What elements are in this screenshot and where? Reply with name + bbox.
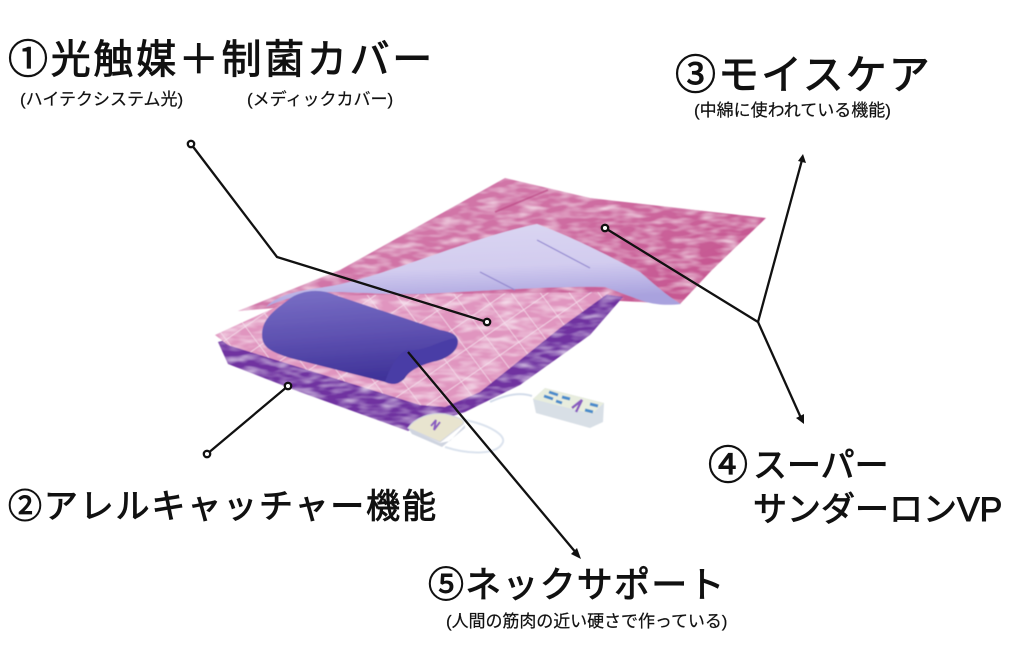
leader lines 3 and 4: branching arrows [602, 154, 806, 424]
heading 4 [708, 444, 1002, 529]
subtext 1 left: (ハイテクシステム光) [20, 90, 183, 109]
subtext 1 right: (メディックカバー) [247, 90, 393, 109]
foot sensor unit [408, 414, 503, 452]
controller with cord [490, 388, 604, 428]
heading 4: サンダーロンVP [753, 491, 1002, 529]
leader line 5: neck support arrow [408, 352, 581, 559]
leader line 1: hi-tech photocatalyst cover [188, 141, 490, 325]
heading 4: ④ [708, 444, 748, 488]
heading 4: スーパー [753, 447, 889, 485]
heading 3: ③モイスケア [675, 52, 932, 98]
lavender folded underside [266, 224, 681, 307]
subtext 3: (中綿に使われている機能) [694, 101, 891, 120]
heading 1: ①光触媒＋制菌カバー [8, 38, 435, 82]
leader line 2: allergen catcher [204, 383, 291, 457]
heading 2: ②アレルキャッチャー機能 [8, 488, 438, 526]
subtext 5: (人間の筋肉の近い硬さで作っている) [446, 612, 727, 631]
heading 5: ⑤ネックサポート [428, 564, 726, 605]
top blanket [238, 178, 766, 311]
pillow [262, 291, 458, 384]
quilted pink pad [215, 292, 610, 407]
purple bottom mattress [218, 292, 623, 431]
